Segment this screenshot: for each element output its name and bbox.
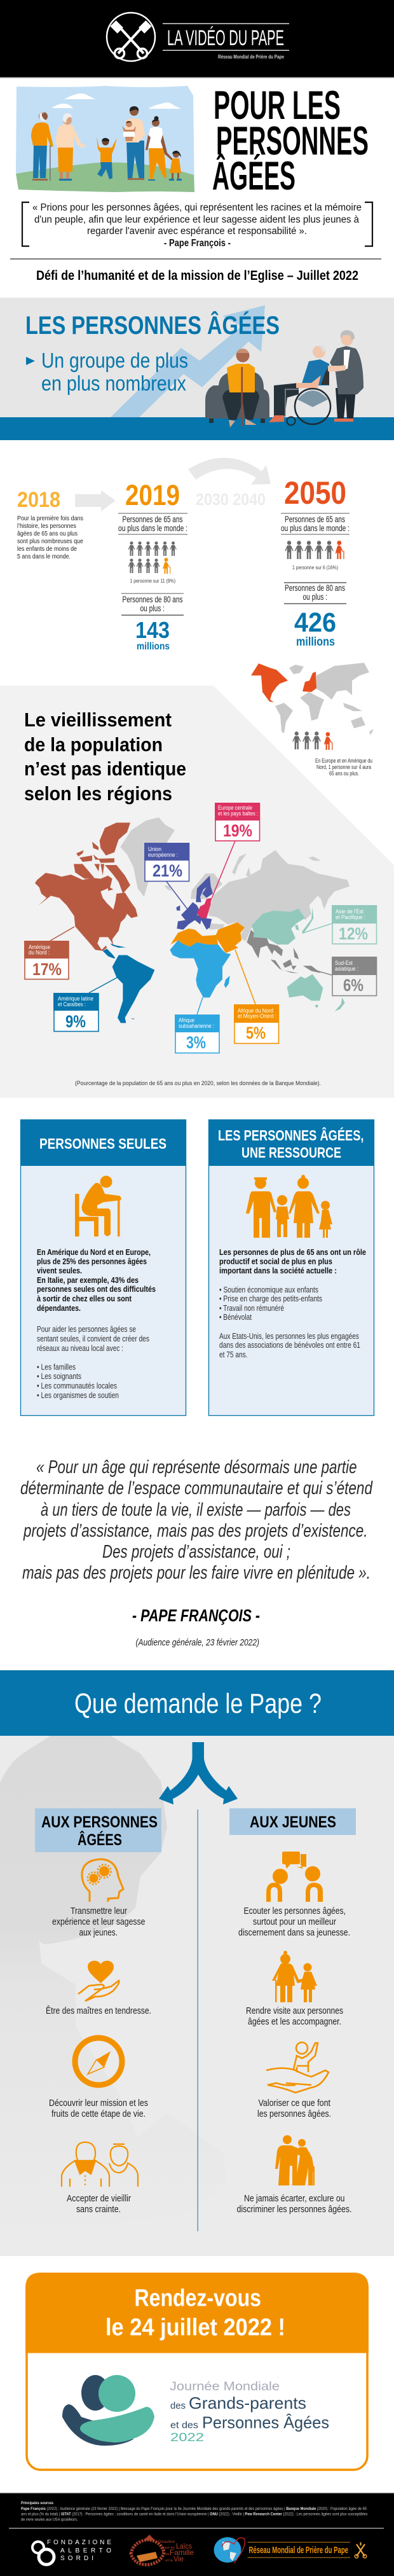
title <box>212 83 369 198</box>
logo: Dicastère <box>131 2535 194 2565</box>
item: transmit experience: Transmettre leur <box>71 1906 127 1916</box>
icon row: 1 person in 6 <box>285 541 344 559</box>
mini world map: Europe and North America highlighted <box>251 663 374 735</box>
callout: East Asia 12%: 12% <box>339 924 368 943</box>
callout: EU 21%: Union <box>148 846 161 852</box>
North America <box>35 822 138 951</box>
icon: two people talking <box>266 1852 323 1902</box>
callout: North America 17%: du Nord : <box>29 949 50 955</box>
heading: aux jeunes <box>229 1808 356 1835</box>
map note: 65 ans ou plus. <box>329 770 359 777</box>
callout: North Africa and Middle East 5% <box>234 1004 279 1043</box>
item: visit the elders: Rendre visite aux personnes <box>246 2005 343 2016</box>
heading: aux jeunes: AUX JEUNES <box>250 1813 336 1831</box>
panel: une ressource: dans des associations de bénévoles ont entre 61 <box>219 1341 360 1350</box>
icon: crossed keys logo <box>107 13 155 61</box>
icon: compass <box>75 2038 122 2085</box>
panel: une ressource: • Soutien économique aux enfants <box>219 1285 318 1294</box>
panel: une ressource: et 75 ans. <box>219 1350 248 1359</box>
item: discover mission: fruits de cette étape de vie. <box>51 2109 146 2119</box>
callout: Central Europe 19%: et les pays baltes : <box>218 810 258 817</box>
stat: 2050: 1 personne sur 6 (16%) <box>292 564 338 571</box>
sources: Pape François (2022) : Audience générale (23 février 2022) | Message du Pape François pour la IIe Journée Mondiale des grands-parents et des personnes âgées | Banque Mondiale (2020) : Population âgée de 65 <box>21 2507 367 2511</box>
stat: 2050: ou plus dans le monde : <box>281 523 350 533</box>
callout: Sub-Saharan Africa 3% <box>175 1014 219 1053</box>
panel: rendez-vous card <box>25 2273 369 2470</box>
callout: EU 21% <box>144 843 189 882</box>
callout: South-East Asia 6%: Sud-Est <box>335 960 353 966</box>
callout: Sub-Saharan Africa 3%: 3% <box>186 1033 206 1052</box>
item: listen to elders: surtout pour un meilleur <box>253 1916 336 1927</box>
body text: plus de 25% des personnes âgées <box>37 1257 147 1266</box>
split arrow <box>159 1742 238 1804</box>
icon: elderly couple <box>62 2142 138 2187</box>
curved arrow to 2050 <box>188 458 271 485</box>
section heading: vieillissement: Le vieillissement <box>24 709 172 731</box>
sources: Principales sources <box>21 2501 53 2505</box>
panel: personnes seules: • Les familles <box>37 1362 76 1371</box>
item: accept ageing: sans crainte. <box>76 2204 121 2215</box>
body text: important dans la société actuelle : <box>219 1266 337 1275</box>
stat: 2050: 2050 <box>284 475 346 511</box>
panel: une ressource: • Bénévolat <box>219 1313 252 1322</box>
item: value what elders do <box>257 2042 331 2119</box>
callout: South-East Asia 6%: 6% <box>343 976 363 995</box>
icon: seated elderly person <box>75 1175 121 1236</box>
sources: de vivre seules aux USA qu'ailleurs. <box>21 2517 78 2522</box>
item: listen to elders <box>238 1852 350 1938</box>
faded years: 2030 2040 <box>196 490 266 509</box>
panel: personnes seules: • Les organismes de soutien <box>37 1391 119 1400</box>
heading band: que demande le pape <box>0 1670 394 1736</box>
logo: Réseau Mondial de Prière du Pape <box>214 2537 367 2563</box>
icon: elder in open hand <box>266 2042 329 2093</box>
logo: Dicastère: Vie <box>173 2554 184 2563</box>
Greenland and Iceland <box>120 817 175 897</box>
icon: grandmother and child <box>272 1951 317 2002</box>
item: transmit experience: aux jeunes. <box>79 1927 118 1938</box>
logo: Fondazione Alberto Sordi <box>32 2539 111 2565</box>
illustration: standing woman <box>328 330 363 422</box>
panel: personnes seules: sentant seules, il convient de créer des <box>37 1334 149 1343</box>
Sub-Saharan Africa <box>170 940 231 997</box>
stat: 2050 <box>281 475 350 649</box>
item: visit the elders: âgées et les accompagner. <box>248 2016 341 2027</box>
logo: Fondazione Alberto Sordi: ALBERTO <box>60 2547 111 2554</box>
item: listen to elders: discernement dans sa jeunesse. <box>238 1927 350 1938</box>
callout: Latin America 9%: et Caraïbes : <box>58 1001 86 1008</box>
panel: personnes seules: • Les communautés locales <box>37 1381 117 1390</box>
panel: personnes seules: réseaux au niveau local avec : <box>37 1344 123 1353</box>
callout: Latin America 9%: Amérique latine <box>58 995 93 1002</box>
item: listen to elders: Ecouter les personnes âgées, <box>244 1906 346 1916</box>
callout: Latin America 9%: 9% <box>65 1012 86 1031</box>
icon row: 1 person in 4 <box>292 731 332 750</box>
icon: head with gears <box>82 1859 123 1902</box>
stat: 2050: 426 <box>294 607 336 638</box>
callout: EU 21%: 21% <box>153 861 182 880</box>
stat: 2018 <box>17 488 83 560</box>
logo wordmark <box>163 23 289 60</box>
footer <box>0 2493 394 2576</box>
body text: En Amérique du Nord et en Europe, <box>37 1247 151 1257</box>
stat: 2050: Personnes de 65 ans <box>285 515 345 524</box>
arrow 2018 to 2019 <box>75 490 116 511</box>
logo wordmark: Réseau Mondial de Prière du Pape <box>218 53 284 60</box>
stat: 2018: 5 ans dans le monde. <box>17 553 71 560</box>
banner subheading <box>26 349 188 395</box>
callout: Central Europe 19%: 19% <box>223 821 252 840</box>
world map by region <box>35 817 350 1023</box>
prayer intention quote: d'un peuple, afin que leur expérience et leur sagesse aident les plus jeunes à <box>34 214 359 225</box>
section heading: vieillissement: de la population <box>24 733 163 756</box>
item: never exclude <box>236 2135 352 2215</box>
callout: East Asia 12%: et Pacifique : <box>336 914 365 920</box>
map note <box>315 758 372 777</box>
Latin America <box>103 943 154 1023</box>
stat: 2019: millions <box>137 641 170 652</box>
body text: dépendantes. <box>37 1303 81 1313</box>
logo: Fondazione Alberto Sordi: SORDI <box>60 2555 93 2562</box>
panel: une ressource <box>208 1119 374 1416</box>
pope quote: Des projets d’assistance, oui ; <box>102 1542 290 1562</box>
item: accept ageing: Accepter de vieillir <box>67 2193 131 2204</box>
callout: Sub-Saharan Africa 3%: Afrique <box>179 1017 194 1023</box>
section heading: vieillissement: selon les régions <box>24 782 172 805</box>
callout: North Africa and Middle East 5%: Afrique du Nord <box>238 1008 273 1014</box>
panel: les personnes âgées banner <box>0 298 394 440</box>
callout: North America 17%: Amérique <box>29 944 50 950</box>
callout: North America 17%: 17% <box>32 960 62 979</box>
logo wordmark: journée mondiale: et des <box>170 2420 198 2431</box>
panel: requests background <box>0 1736 394 2256</box>
heading: aux personnes âgées: AUX PERSONNES <box>41 1813 158 1831</box>
item: discover mission <box>49 2038 148 2119</box>
map note: Nord, 1 personne sur 4 aura <box>316 764 371 770</box>
prayer intention quote: - Pape François - <box>164 238 231 249</box>
logo: Fondazione Alberto Sordi: FONDAZIONE <box>47 2539 111 2546</box>
logo wordmark: journée mondiale: Grands-parents <box>189 2393 306 2413</box>
callout: North Africa and Middle East 5%: et Moyen-Orient : <box>238 1013 276 1019</box>
logo: Dicastère: et la <box>165 2559 173 2563</box>
item: masters of tenderness: Être des maîtres en tendresse. <box>46 2005 151 2016</box>
body text: personnes seules ont des difficultés <box>37 1284 156 1294</box>
item: masters of tenderness <box>46 1961 151 2016</box>
stat: 2018: l’histoire, les personnes <box>17 522 76 530</box>
Central Europe and Baltics <box>197 898 211 918</box>
logo: Dicastère: Laïcs <box>176 2542 192 2551</box>
logo: Dicastère: pour les <box>163 2546 175 2550</box>
quote attribution: - PAPE FRANÇOIS - <box>132 1606 260 1625</box>
panel: une ressource: UNE RESSOURCE <box>241 1144 341 1161</box>
callout: Sub-Saharan Africa 3%: subsaharienne : <box>179 1023 214 1029</box>
item: accept ageing <box>62 2142 138 2215</box>
panel: personnes seules: Pour aider les personnes âgées se <box>37 1325 136 1334</box>
connector lines <box>50 841 332 1014</box>
header band <box>0 0 394 78</box>
pope quote <box>20 1457 373 1583</box>
logo wordmark: LA VIDÉO DU PAPE <box>167 26 284 50</box>
illustration: man in wheelchair <box>269 345 330 425</box>
callout: North America 17% <box>24 941 69 980</box>
title: ÂGÉES <box>212 153 296 198</box>
callout: EU 21%: européenne : <box>148 852 178 858</box>
logo wordmark: journée mondiale: des <box>170 2400 186 2411</box>
panel: regional ageing background <box>0 686 394 1098</box>
head silhouette <box>0 1736 226 2239</box>
item: never exclude: discriminer les personnes âgées. <box>236 2204 352 2215</box>
banner subheading: en plus nombreux <box>41 371 186 395</box>
panel: une ressource: • Prise en charge des petits-enfants <box>219 1294 322 1303</box>
logo: Dicastère: Dicastère <box>158 2540 175 2544</box>
heading band: que demande le pape: Que demande le Pape ? <box>74 1688 322 1719</box>
stat: 2018: les enfants de moins de <box>17 545 77 553</box>
boy <box>97 137 117 179</box>
callout: South-East Asia 6% <box>332 957 377 996</box>
item: value what elders do: les personnes âgées. <box>257 2109 331 2119</box>
logo wordmark: journée mondiale: Personnes Âgées <box>202 2413 329 2432</box>
item: transmit experience: expérience et leur sagesse <box>52 1916 145 1927</box>
callout: Latin America 9% <box>53 993 98 1032</box>
icon: heart in hand <box>78 1961 119 2001</box>
panel: une ressource: Aux Etats-Unis, les personnes les plus engagées <box>219 1332 359 1341</box>
section heading: vieillissement <box>24 709 186 805</box>
sources <box>21 2501 368 2522</box>
icon: family <box>246 1175 332 1238</box>
panel: rendez-vous card: Rendez-vous <box>135 2285 261 2311</box>
stat: 2019: Personnes de 65 ans <box>122 515 183 524</box>
stat: 2050: millions <box>296 635 335 649</box>
callout: North Africa and Middle East 5%: 5% <box>246 1023 266 1042</box>
panel: personnes seules: • Les soignants <box>37 1372 81 1381</box>
logo: Dicastère: la <box>165 2552 170 2556</box>
banner heading: LES PERSONNES ÂGÉES <box>25 310 280 340</box>
logo wordmark: journée mondiale: Journée Mondiale <box>170 2380 280 2393</box>
North Africa and Middle East <box>170 922 245 953</box>
illustration: family with grandparents <box>16 86 194 192</box>
stat: 2050: Personnes de 80 ans <box>285 583 345 593</box>
map note: En Europe et en Amérique du <box>315 758 372 764</box>
stat: 2019: ou plus dans le monde : <box>118 523 187 533</box>
gray regions: Russia, Arctic, Scandinavia, Turkey <box>191 850 350 941</box>
panel: une ressource: • Travail non rémunéré <box>219 1304 284 1313</box>
heading: aux personnes âgées: ÂGÉES <box>78 1830 122 1849</box>
stat: 2018: Pour la première fois dans <box>17 515 83 522</box>
stat: 2019: ou plus : <box>140 604 165 613</box>
prayer intention quote <box>22 202 372 249</box>
stat: 2018: âgées de 65 ans ou plus <box>17 530 78 537</box>
girl <box>169 151 182 181</box>
section heading: vieillissement: n’est pas identique <box>24 758 186 780</box>
grandmother <box>55 113 86 181</box>
panel: personnes seules <box>20 1119 186 1416</box>
quote attribution <box>132 1606 260 1648</box>
item: transmit experience <box>52 1859 145 1938</box>
body text: productif et social de plus en plus <box>219 1257 332 1266</box>
callout: East Asia 12% <box>332 905 377 944</box>
logo mark: journée mondiale <box>62 2375 154 2446</box>
panel: personnes seules: PERSONNES SEULES <box>39 1135 166 1152</box>
quote attribution: (Audience générale, 23 février 2022) <box>136 1638 259 1648</box>
stat: 2019: Personnes de 80 ans <box>122 595 183 604</box>
panel: rendez-vous card: le 24 juillet 2022 ! <box>105 2314 285 2341</box>
stat: 2050: ou plus : <box>302 592 327 602</box>
sources: ans et plus (% du total) | ISTAT (2017) : Personnes âgées : conditions de santé en Italie et dans l'Union européenne | ONU (2022) : Vieillir | Pew Research Center (2022) : Les personnes âgées sont plus susceptibles <box>21 2512 368 2516</box>
logo wordmark: journée mondiale: 2022 <box>170 2431 204 2444</box>
body text <box>37 1247 156 1313</box>
icon: person embracing elder <box>275 2135 315 2185</box>
icon row: 1 person in 11 <box>128 541 177 574</box>
stat: 2019: 2019 <box>125 479 180 511</box>
item: never exclude: Ne jamais écarter, exclure ou <box>244 2193 344 2204</box>
body text: En Italie, par exemple, 43% des <box>37 1275 139 1285</box>
stat: 2019: 1 personne sur 11 (9%) <box>130 578 175 584</box>
stat: 2018: sont plus nombreuses que <box>17 537 83 545</box>
logo wordmark: journée mondiale <box>170 2380 329 2444</box>
clouds <box>51 93 181 109</box>
callout: South-East Asia 6%: asiatique : <box>335 966 358 972</box>
map source note: (Pourcentage de la population de 65 ans ou plus en 2020, selon les données de la Banque Mondiale). <box>75 1080 321 1087</box>
item: discover mission: Découvrir leur mission et les <box>49 2098 148 2109</box>
mother <box>146 116 173 181</box>
stat: 2019 <box>118 479 187 652</box>
illustration: man in armchair <box>205 349 269 427</box>
stat: 2019: 143 <box>135 617 170 643</box>
brackets <box>22 202 372 246</box>
callout: Central Europe 19% <box>215 803 260 841</box>
body text <box>219 1247 366 1275</box>
rising arrow <box>111 305 265 417</box>
prayer intention quote: « Prions pour les personnes âgées, qui représentent les racines et la mémoire <box>32 202 362 213</box>
logo: Dicastère: Famille <box>170 2548 194 2557</box>
item: visit the elders <box>246 1951 343 2027</box>
item: value what elders do: Valoriser ce que font <box>258 2098 331 2109</box>
body text: à sortir de chez elles ou sont <box>37 1294 132 1303</box>
prayer intention quote: regarder l'avenir avec espérance et responsabilité ». <box>87 226 307 237</box>
body text: Les personnes de plus de 65 ans ont un rôle <box>219 1247 366 1257</box>
stat: 2018: 2018 <box>17 488 60 512</box>
European Union <box>176 876 213 930</box>
East Asia and Pacific <box>252 908 345 1011</box>
South-East and South Asia <box>247 930 321 973</box>
grandfather <box>31 112 53 181</box>
father with baby <box>122 106 145 180</box>
callout: East Asia 12%: Asie de l'Est <box>336 908 363 915</box>
banner subheading: Un groupe de plus <box>41 349 188 372</box>
body text: vivent seules. <box>37 1266 82 1275</box>
callout: Central Europe 19%: Europe centrale <box>218 805 252 811</box>
heading: aux personnes âgées <box>35 1808 161 1852</box>
